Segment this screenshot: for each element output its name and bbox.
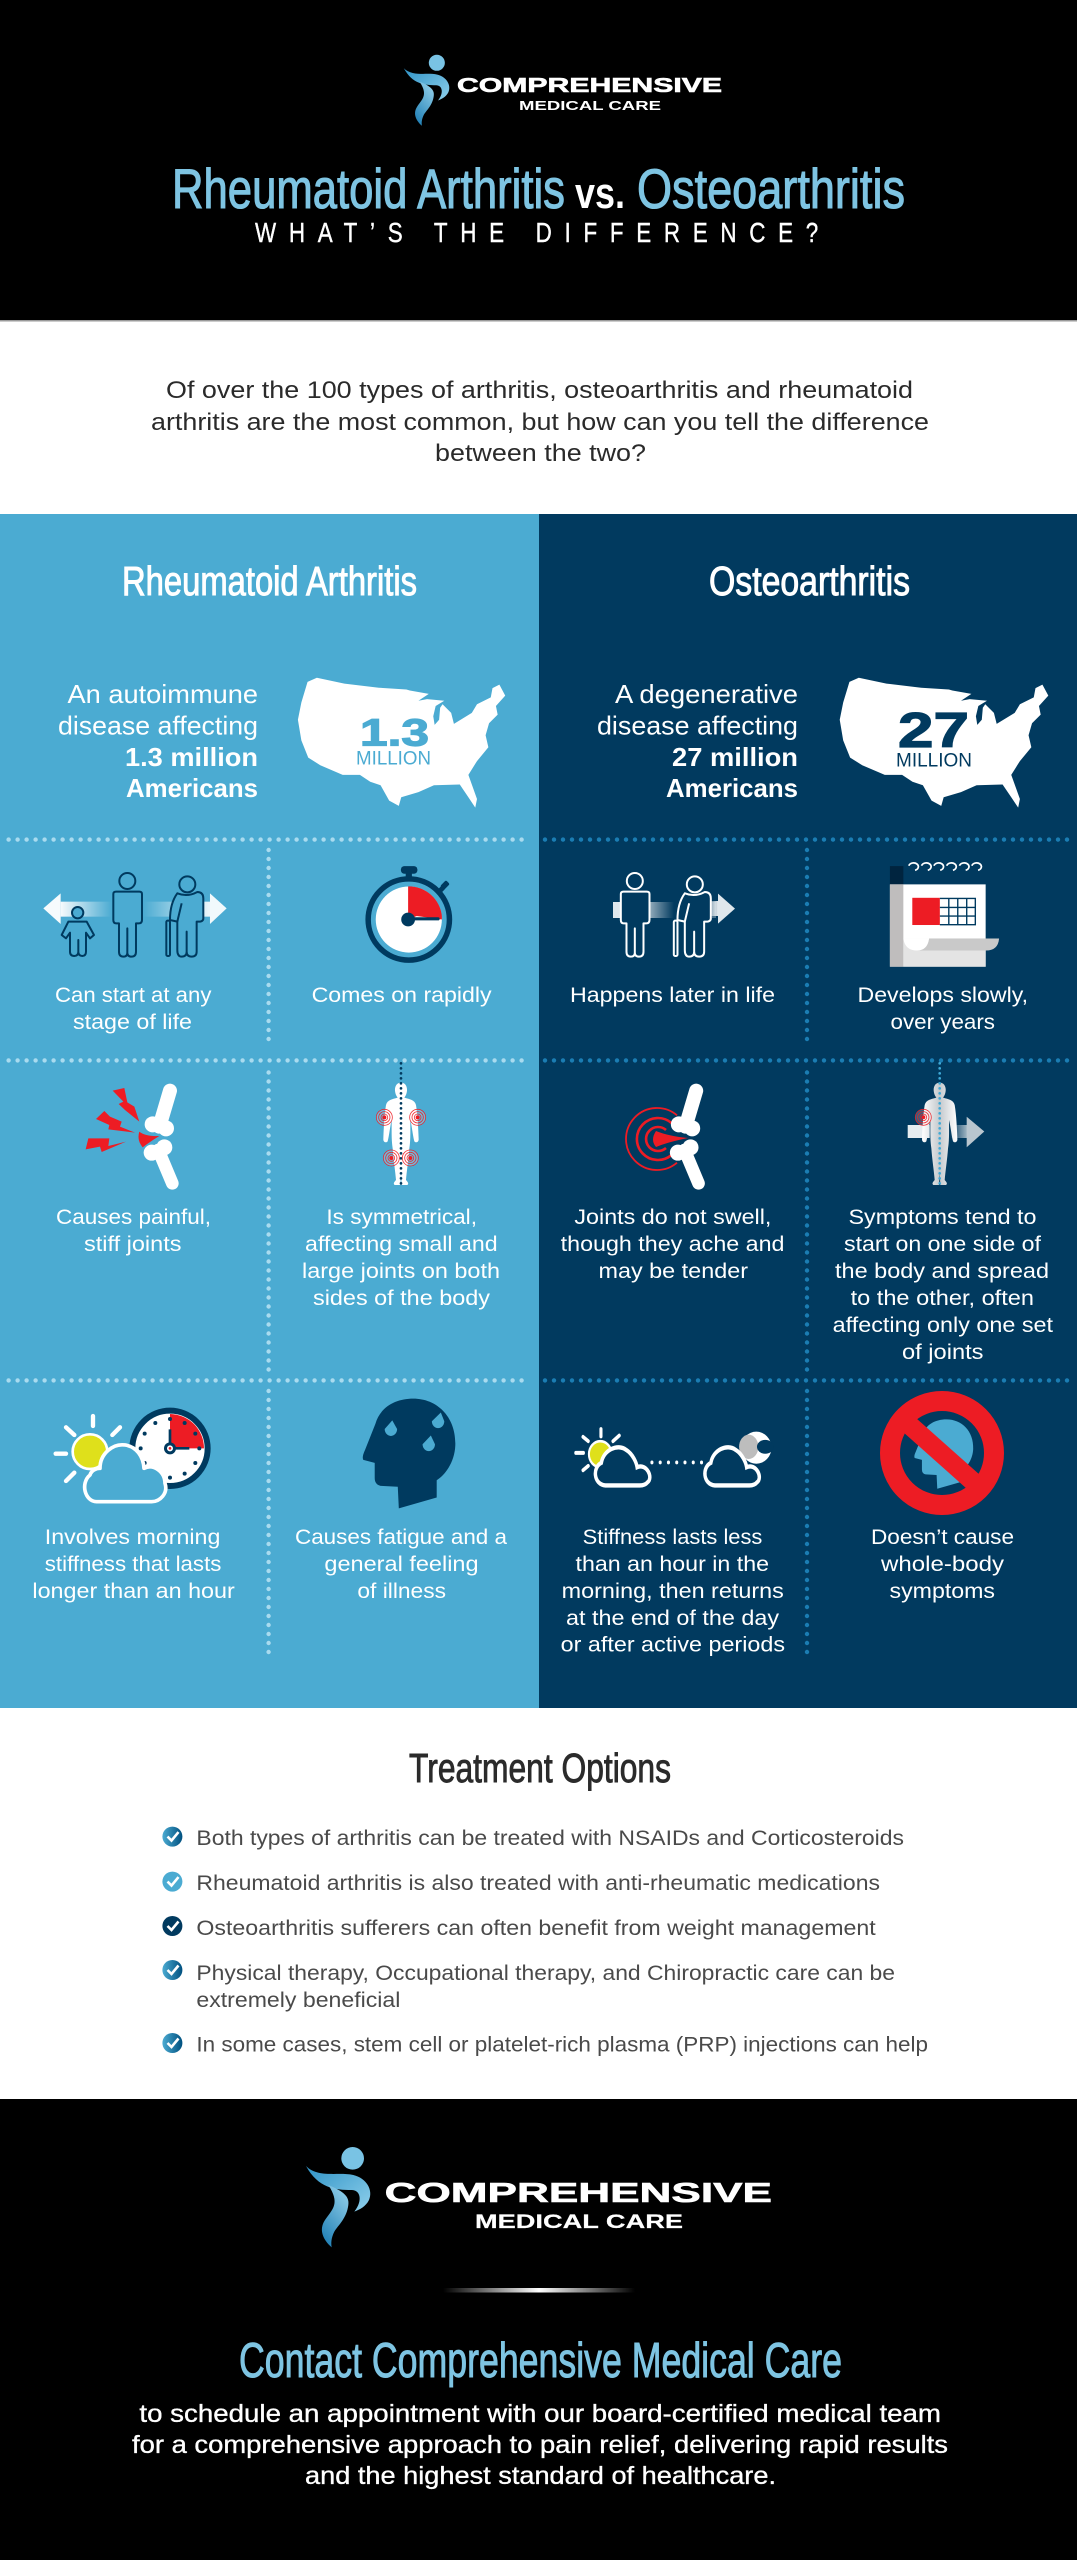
- caption: Happens later in life: [570, 984, 775, 1007]
- icon: people of all ages: [43, 873, 227, 957]
- caption: whole-body: [880, 1553, 1005, 1576]
- caption: over years: [890, 1011, 995, 1034]
- panel heading: Osteoarthritis: [709, 558, 910, 604]
- caption: sides of the body: [313, 1287, 491, 1310]
- lead statement: A degenerative: [615, 679, 798, 709]
- intro text: Of over the 100 types of arthritis, osteoarthritis and rheumatoid: [166, 377, 913, 404]
- icon: one-sided body with arrow: [908, 1063, 984, 1188]
- caption: [561, 1206, 784, 1283]
- icon: symmetrical body: [376, 1063, 426, 1188]
- contact heading: Contact Comprehensive Medical Care: [239, 2334, 842, 2388]
- icon: stopwatch: [368, 866, 450, 960]
- icon: no whole-body symptoms: [890, 1401, 994, 1505]
- header logo: MEDICAL CARE: [519, 99, 661, 113]
- caption: at the end of the day: [566, 1607, 780, 1630]
- bullet list: Osteoarthritis sufferers can often benefit from weight management: [196, 1917, 876, 1940]
- bullet list: [162, 1827, 928, 2057]
- footer logo: COMPREHENSIVE: [385, 2177, 772, 2208]
- caption: Symptoms tend to: [848, 1206, 1036, 1229]
- icon: calendar: [890, 863, 999, 967]
- caption: [32, 1526, 235, 1603]
- caption: [833, 1206, 1053, 1364]
- caption: stage of life: [73, 1011, 192, 1034]
- icon: morning sun, cloud and clock: [56, 1411, 208, 1502]
- header logo: [404, 55, 722, 126]
- contact text: to schedule an appointment with our board-certified medical team: [139, 2400, 941, 2428]
- header band: [0, 0, 1077, 322]
- caption: affecting only one set: [833, 1314, 1053, 1337]
- main title: [172, 157, 905, 220]
- contact text: and the highest standard of healthcare.: [305, 2462, 776, 2490]
- us map: 1.3 million: 1.3: [360, 712, 429, 754]
- main title: vs.: [575, 169, 625, 218]
- caption: symptoms: [890, 1580, 995, 1603]
- us map: 1.3 million: [298, 678, 505, 808]
- icon: sun and moon clouds: [576, 1429, 774, 1485]
- caption: the body and spread: [835, 1260, 1049, 1283]
- section: treatment options: [162, 1745, 928, 2057]
- caption: [302, 1206, 500, 1310]
- contact text: [132, 2400, 948, 2490]
- footer logo: [306, 2147, 772, 2247]
- bullet list: Physical therapy, Occupational therapy, and Chiropractic care can be: [196, 1962, 895, 1985]
- us map: 27 million: [840, 678, 1048, 808]
- caption: of joints: [902, 1341, 984, 1364]
- caption: may be tender: [598, 1260, 748, 1283]
- main title: Rheumatoid Arthritis: [172, 157, 565, 220]
- caption: [55, 984, 212, 1034]
- caption: Comes on rapidly: [312, 984, 492, 1007]
- bullet list: extremely beneficial: [196, 1989, 400, 2012]
- header logo: COMPREHENSIVE: [457, 75, 722, 97]
- bullet list: Both types of arthritis can be treated with NSAIDs and Corticosteroids: [196, 1827, 904, 1850]
- bullet list: In some cases, stem cell or platelet-rich plasma (PRP) injections can help: [196, 2034, 928, 2057]
- lead statement: disease affecting: [58, 710, 258, 740]
- caption: or after active periods: [561, 1634, 785, 1656]
- lead statement: 27 million: [672, 742, 798, 772]
- lead statement: Americans: [666, 773, 798, 803]
- caption: affecting small and: [305, 1233, 498, 1256]
- us map: 27 million: MILLION: [896, 750, 972, 772]
- intro text: [151, 377, 929, 467]
- caption: Joints do not swell,: [574, 1206, 771, 1229]
- caption: morning, then returns: [562, 1580, 784, 1603]
- caption: of illness: [357, 1580, 446, 1603]
- contact text: for a comprehensive approach to pain relief, delivering rapid results: [132, 2431, 948, 2459]
- caption: [561, 1526, 785, 1656]
- caption: Causes painful,: [56, 1206, 211, 1229]
- caption: stiffness that lasts: [45, 1553, 221, 1576]
- intro text: arthritis are the most common, but how can you tell the difference: [151, 409, 929, 436]
- footer band: [0, 2099, 1077, 2560]
- caption: start on one side of: [844, 1233, 1041, 1256]
- caption: Develops slowly,: [858, 984, 1028, 1007]
- lead statement: Americans: [126, 773, 258, 803]
- caption: general feeling: [324, 1553, 479, 1576]
- panel: osteoarthritis: [539, 514, 1077, 1708]
- us map: 1.3 million: MILLION: [356, 748, 431, 770]
- heading: Treatment Options: [409, 1745, 671, 1791]
- lead statement: [58, 679, 258, 803]
- caption: than an hour in the: [576, 1553, 769, 1576]
- icon: aching joint: [626, 1091, 700, 1183]
- icon: adult and elder with arrow: [613, 873, 735, 957]
- caption: Can start at any: [55, 984, 212, 1007]
- caption: Is symmetrical,: [326, 1206, 477, 1229]
- lead statement: disease affecting: [597, 710, 798, 740]
- lead statement: An autoimmune: [68, 679, 258, 709]
- icon: painful joint: [86, 1088, 174, 1183]
- caption: [295, 1526, 507, 1603]
- caption: Stiffness lasts less: [583, 1526, 762, 1549]
- caption: Causes fatigue and a: [295, 1526, 507, 1549]
- panel: rheumatoid arthritis: [0, 514, 539, 1708]
- caption: stiff joints: [84, 1233, 182, 1256]
- icon: head with sweat drops: [363, 1399, 455, 1508]
- caption: Involves morning: [45, 1526, 220, 1549]
- panel heading: Rheumatoid Arthritis: [122, 558, 417, 604]
- caption: though they ache and: [561, 1233, 784, 1256]
- footer logo: MEDICAL CARE: [475, 2212, 683, 2233]
- caption: longer than an hour: [32, 1580, 235, 1603]
- caption: [871, 1526, 1014, 1603]
- main title: Osteoarthritis: [637, 157, 905, 220]
- caption: [858, 984, 1028, 1034]
- caption: large joints on both: [302, 1260, 500, 1283]
- caption: Doesn’t cause: [871, 1526, 1014, 1549]
- bullet list: Rheumatoid arthritis is also treated with anti-rheumatic medications: [196, 1872, 880, 1895]
- us map: 27 million: 27: [898, 704, 969, 758]
- subtitle: WHAT’S THE DIFFERENCE?: [255, 218, 818, 249]
- caption: [56, 1206, 211, 1256]
- lead statement: [597, 679, 798, 803]
- caption: to the other, often: [851, 1287, 1034, 1310]
- lead statement: 1.3 million: [125, 742, 258, 772]
- intro text: between the two?: [435, 440, 646, 467]
